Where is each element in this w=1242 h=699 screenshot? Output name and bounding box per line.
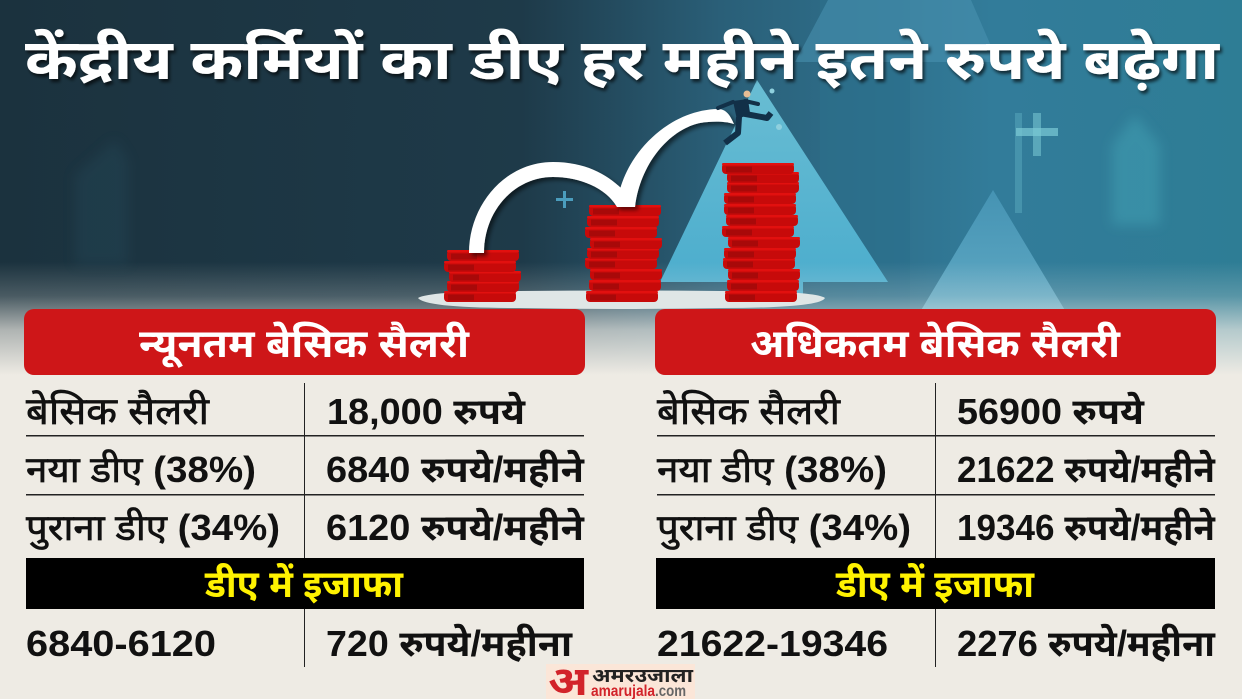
icon: jumping businessman bbox=[718, 90, 771, 143]
banner: DA increase: डीए में इजाफा bbox=[835, 562, 1035, 606]
table: minimum: 6120 रुपये/महीने bbox=[326, 506, 585, 548]
table: minimum: बेसिक सैलरी bbox=[26, 389, 210, 433]
platform bbox=[418, 290, 825, 309]
small triangle bbox=[920, 190, 1066, 312]
table: maximum: 19346 रुपये/महीने bbox=[957, 506, 1216, 548]
table: minimum: 720 रुपये/महीना bbox=[326, 622, 573, 664]
table: maximum: 21622-19346 bbox=[657, 623, 888, 664]
banner: DA increase: डीए में इजाफा bbox=[204, 562, 404, 606]
title: केंद्रीय कर्मियों का डीए हर महीने इतने रुपये बढ़ेगा bbox=[25, 28, 1221, 91]
panel: maximum basic salary bbox=[655, 309, 1216, 667]
coin stack 1 bbox=[444, 250, 521, 302]
header background illustration bbox=[0, 0, 1242, 375]
logo: Amar Ujala: अमरउजाला bbox=[592, 666, 693, 687]
coin stack 3 bbox=[722, 163, 800, 302]
table: maximum: नया डीए (38%) bbox=[657, 449, 887, 490]
table: minimum: 6840-6120 bbox=[26, 623, 216, 664]
heading: minimum: न्यूनतम बेसिक सैलरी bbox=[139, 322, 471, 368]
banner: DA increase bbox=[26, 558, 584, 609]
illustration: coin stacks and jumping man bbox=[418, 90, 825, 309]
table: maximum: 56900 रुपये bbox=[957, 390, 1145, 432]
banner: DA increase bbox=[656, 558, 1215, 609]
table: maximum: बेसिक सैलरी bbox=[657, 389, 841, 433]
table: maximum: 21622 रुपये/महीने bbox=[957, 448, 1216, 490]
heading: maximum: अधिकतम बेसिक सैलरी bbox=[750, 322, 1122, 366]
heading: minimum bbox=[24, 309, 585, 375]
table: maximum: 2276 रुपये/महीना bbox=[957, 622, 1216, 664]
table: maximum: पुराना डीए (34%) bbox=[657, 507, 911, 550]
light blue triangle bbox=[660, 80, 888, 296]
arrow: white jump arcs bbox=[469, 109, 734, 253]
table: minimum: 18,000 रुपये bbox=[327, 390, 526, 432]
table: maximum bbox=[656, 383, 1216, 667]
table: minimum: पुराना डीए (34%) bbox=[26, 507, 280, 550]
logo: Amar Ujala bbox=[546, 660, 695, 699]
panel: minimum basic salary bbox=[24, 309, 585, 667]
heading: maximum bbox=[655, 309, 1216, 375]
table: minimum: नया डीए (38%) bbox=[26, 449, 256, 490]
coin stack 2 bbox=[585, 205, 662, 302]
table: minimum: 6840 रुपये/महीने bbox=[326, 448, 585, 490]
table: minimum bbox=[26, 383, 585, 667]
